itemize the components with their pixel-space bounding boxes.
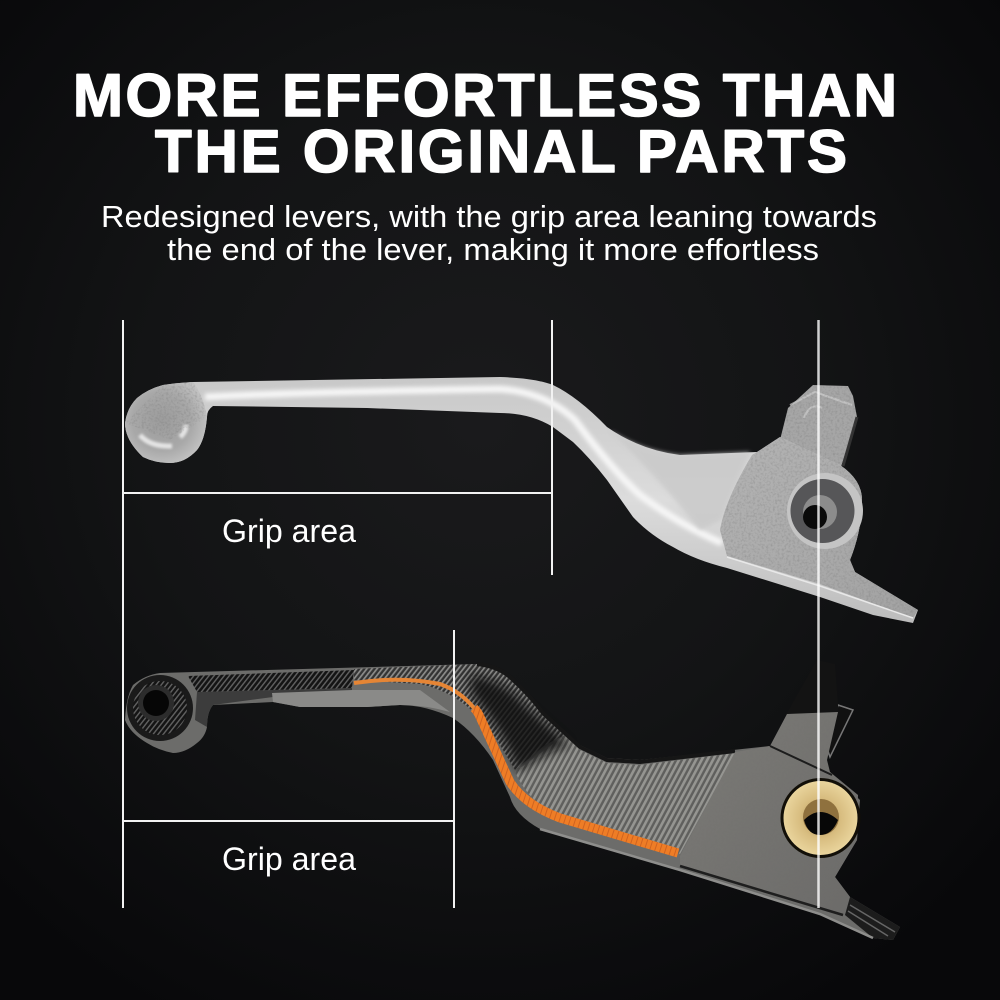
ball end xyxy=(125,382,207,463)
ribbed upper band xyxy=(354,664,565,770)
label: upper grip area: Grip area xyxy=(222,513,356,549)
title: THE ORIGINAL PARTS xyxy=(155,118,847,185)
orange accent stripe, thick section xyxy=(474,708,678,853)
lower grip area dimension lines xyxy=(123,630,454,908)
steel mounting plate xyxy=(680,712,858,915)
label: lower grip area: Grip area xyxy=(222,841,356,877)
dark shadow band xyxy=(470,675,570,772)
bottom edge highlight xyxy=(540,829,873,938)
rear pivot reference line xyxy=(817,320,820,908)
cast mounting plate xyxy=(720,437,918,618)
lever body xyxy=(125,377,918,623)
ribbed lever tip xyxy=(845,897,900,940)
soft shading on the web xyxy=(610,430,750,530)
dark arm below ribs xyxy=(195,688,352,727)
lever underside xyxy=(125,664,900,940)
subtitle xyxy=(101,200,877,267)
ribbed grey panel xyxy=(515,735,735,854)
dark top edge xyxy=(477,664,735,762)
plate top crease xyxy=(770,746,832,775)
rear fin xyxy=(826,705,853,757)
highlight along the arm xyxy=(205,389,722,543)
ribbed dark arm xyxy=(188,670,354,692)
eyelet end xyxy=(127,675,193,741)
bevelled edge xyxy=(680,866,843,915)
bushing hole xyxy=(787,473,863,549)
black aftermarket lever xyxy=(125,660,900,940)
brass bushing xyxy=(780,778,860,858)
subtitle: Redesigned levers, with the grip area leaning towards xyxy=(101,200,877,234)
subtitle: the end of the lever, making it more effortless xyxy=(167,233,819,267)
rear upper black tab xyxy=(785,660,838,715)
lever pivot tab xyxy=(780,385,857,470)
silver original lever xyxy=(125,377,918,623)
title: MORE EFFORTLESS THAN xyxy=(73,62,897,129)
orange accent stripe, thin section xyxy=(354,680,474,708)
title xyxy=(73,62,897,185)
upper grip area dimension lines xyxy=(123,320,552,908)
light machined flat xyxy=(272,690,450,712)
